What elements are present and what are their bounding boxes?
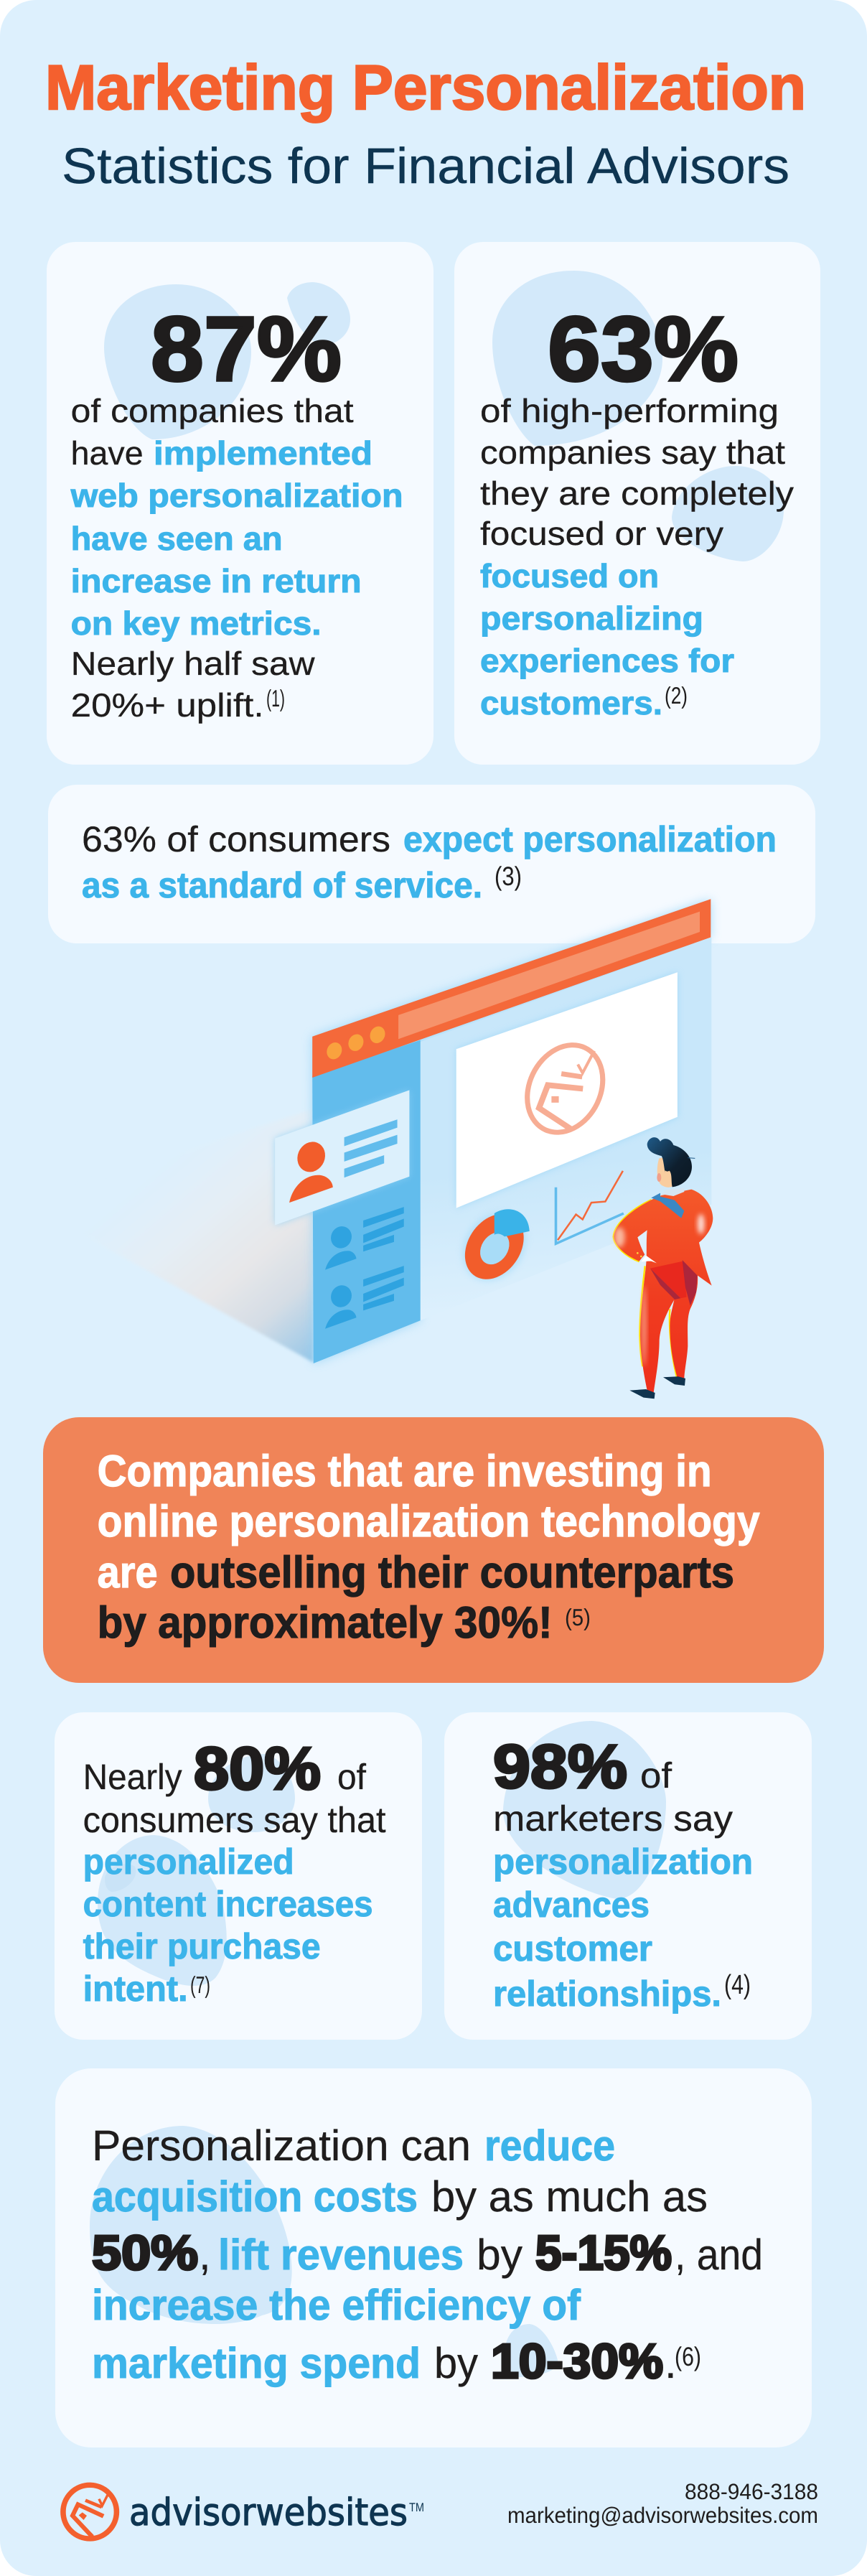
panel: 87% of companies: of companies that — [71, 392, 354, 429]
panel: call-out outselling counterparts: outselling their counterparts — [170, 1548, 734, 1597]
panel: 87% of companies — [47, 242, 434, 765]
panel: 63% of consumers — [48, 785, 815, 943]
panel: nearly 80% of consumers — [55, 1712, 422, 2040]
panel: reduce acquisition costs: by — [434, 2339, 478, 2387]
left column — [312, 1040, 421, 1363]
panel: call-out outselling counterparts: (5) — [565, 1604, 591, 1630]
panel: 87% of companies: increase in return — [71, 562, 362, 599]
panel: nearly 80% of consumers: (7) — [190, 1971, 210, 1998]
panel: 63% of consumers: 63% of consumers — [82, 819, 390, 859]
head — [657, 1156, 672, 1187]
logo: advisorwebsites: advisorwebsites — [129, 2491, 408, 2534]
panel: 63% of high-performing companies: customers. — [480, 684, 662, 722]
panel: 63% of high-performing companies: 63% — [548, 298, 739, 401]
contact details: marketing@advisorwebsites.com — [507, 2503, 818, 2528]
panel: 87% of companies: Nearly half saw — [71, 645, 315, 682]
panel: nearly 80% of consumers: Nearly — [83, 1757, 182, 1797]
panel: 87% of companies: web personalization — [70, 477, 403, 514]
panel: reduce acquisition costs: (6) — [675, 2342, 701, 2371]
icon: logo mark — [63, 2485, 116, 2539]
panel: 63% of high-performing companies: companies say that — [480, 434, 785, 471]
panel: nearly 80% of consumers: their purchase — [83, 1926, 321, 1966]
panel: reduce acquisition costs: increase the efficiency of — [92, 2281, 581, 2329]
panel: 63% of consumers: as a standard of service. — [82, 865, 482, 905]
panel: reduce acquisition costs: 50% — [92, 2226, 198, 2280]
panel: call-out outselling counterparts: are — [98, 1548, 158, 1597]
panel: 98% of marketers: relationships. — [493, 1974, 721, 2014]
panel: reduce acquisition costs — [55, 2068, 812, 2447]
panel: 98% of marketers: 98% — [493, 1732, 627, 1801]
contact details — [507, 2479, 818, 2528]
line chart — [556, 1171, 624, 1243]
panel: reduce acquisition costs: 10-30% — [491, 2334, 663, 2389]
illustration: man in red suit — [614, 1137, 713, 1399]
panel: 98% of marketers: marketers say — [493, 1798, 733, 1839]
panel: nearly 80% of consumers: intent. — [83, 1969, 188, 2009]
white screen with logo mark — [456, 972, 678, 1208]
hair — [647, 1137, 692, 1187]
panel: 87% of companies: have seen an — [71, 520, 283, 557]
panel: reduce acquisition costs: , — [199, 2231, 211, 2279]
panel: reduce acquisition costs: by — [477, 2231, 522, 2279]
floating profile card — [275, 1090, 409, 1225]
panel: nearly 80% of consumers: personalized — [83, 1842, 294, 1882]
title: Statistics for Financial Advisors — [62, 138, 789, 194]
panel: reduce acquisition costs: by as much as — [431, 2173, 708, 2221]
title — [45, 52, 806, 194]
suit — [614, 1190, 713, 1393]
logo: advisorwebsites: TM — [409, 2501, 424, 2514]
window wall — [421, 937, 711, 1320]
top browser bar — [312, 899, 711, 1078]
panel: 87% of companies: implemented — [154, 434, 372, 472]
illustration: browser window dashboard — [275, 899, 711, 1363]
panel: 87% of companies: 87% — [151, 298, 342, 401]
panel: 87% of companies: on key metrics. — [71, 605, 322, 642]
donut chart — [451, 1202, 538, 1292]
panel: reduce acquisition costs: , and — [675, 2231, 763, 2279]
cuff and hand — [641, 1256, 657, 1263]
panel: 98% of marketers: advances — [493, 1885, 650, 1925]
panel: 87% of companies: have — [71, 434, 144, 472]
panel: nearly 80% of consumers: 80% — [194, 1735, 321, 1802]
panel: reduce acquisition costs: . — [665, 2339, 677, 2387]
panel: 63% of high-performing companies: focused or very — [480, 515, 723, 552]
panel: 63% of high-performing companies — [454, 242, 820, 765]
panel: reduce acquisition costs: lift revenues — [218, 2231, 464, 2279]
panel: 98% of marketers: customer — [493, 1928, 652, 1969]
panel: 98% of marketers: of — [640, 1755, 672, 1796]
panel: 87% of companies: (1) — [266, 685, 285, 711]
panel: reduce acquisition costs: Personalization can — [92, 2122, 471, 2170]
floor shadow of illustration — [79, 1109, 314, 1363]
collar and scarf — [662, 1188, 684, 1196]
panel: 63% of consumers: expect personalization — [403, 819, 777, 859]
title: Marketing Personalization — [45, 52, 806, 123]
panel: call-out outselling counterparts: by approximately 30%! — [98, 1598, 553, 1648]
profile rows in column — [325, 1207, 404, 1329]
panel: 63% of consumers: (3) — [495, 862, 522, 891]
panel: 63% of high-performing companies: experiences for — [480, 642, 734, 679]
panel: call-out outselling counterparts — [43, 1417, 824, 1683]
panel: 63% of high-performing companies: personalizing — [480, 599, 703, 637]
panel: reduce acquisition costs: marketing spend — [92, 2339, 421, 2387]
panel: nearly 80% of consumers: consumers say that — [83, 1800, 386, 1840]
panel: nearly 80% of consumers: content increases — [83, 1884, 373, 1924]
panel: 63% of high-performing companies: they are completely — [480, 475, 794, 512]
yellow rim light — [614, 1200, 677, 1378]
panel: 98% of marketers — [444, 1712, 812, 2040]
coat shadows — [650, 1261, 687, 1298]
logo: advisorwebsites — [63, 2485, 424, 2539]
panel: 63% of high-performing companies: focused on — [480, 557, 659, 594]
panel: 63% of high-performing companies: of high-performing — [480, 392, 779, 429]
panel: reduce acquisition costs: 5-15% — [535, 2226, 672, 2280]
highlights — [614, 1227, 625, 1247]
panel: 87% of companies: 20%+ uplift. — [71, 686, 264, 724]
panel: 98% of marketers: personalization — [493, 1842, 753, 1882]
contact details: 888-946-3188 — [685, 2479, 818, 2504]
panel: call-out outselling counterparts: Companies that are investing in — [98, 1447, 712, 1496]
panel: nearly 80% of consumers: of — [337, 1757, 366, 1797]
panel: call-out outselling counterparts: online personalization technology — [98, 1497, 760, 1546]
panel: 63% of high-performing companies: (2) — [665, 682, 688, 709]
panel: 98% of marketers: (4) — [724, 1970, 751, 2000]
panel: reduce acquisition costs: reduce — [484, 2122, 615, 2170]
panel: reduce acquisition costs: acquisition costs — [92, 2173, 418, 2221]
shoes — [629, 1389, 655, 1399]
